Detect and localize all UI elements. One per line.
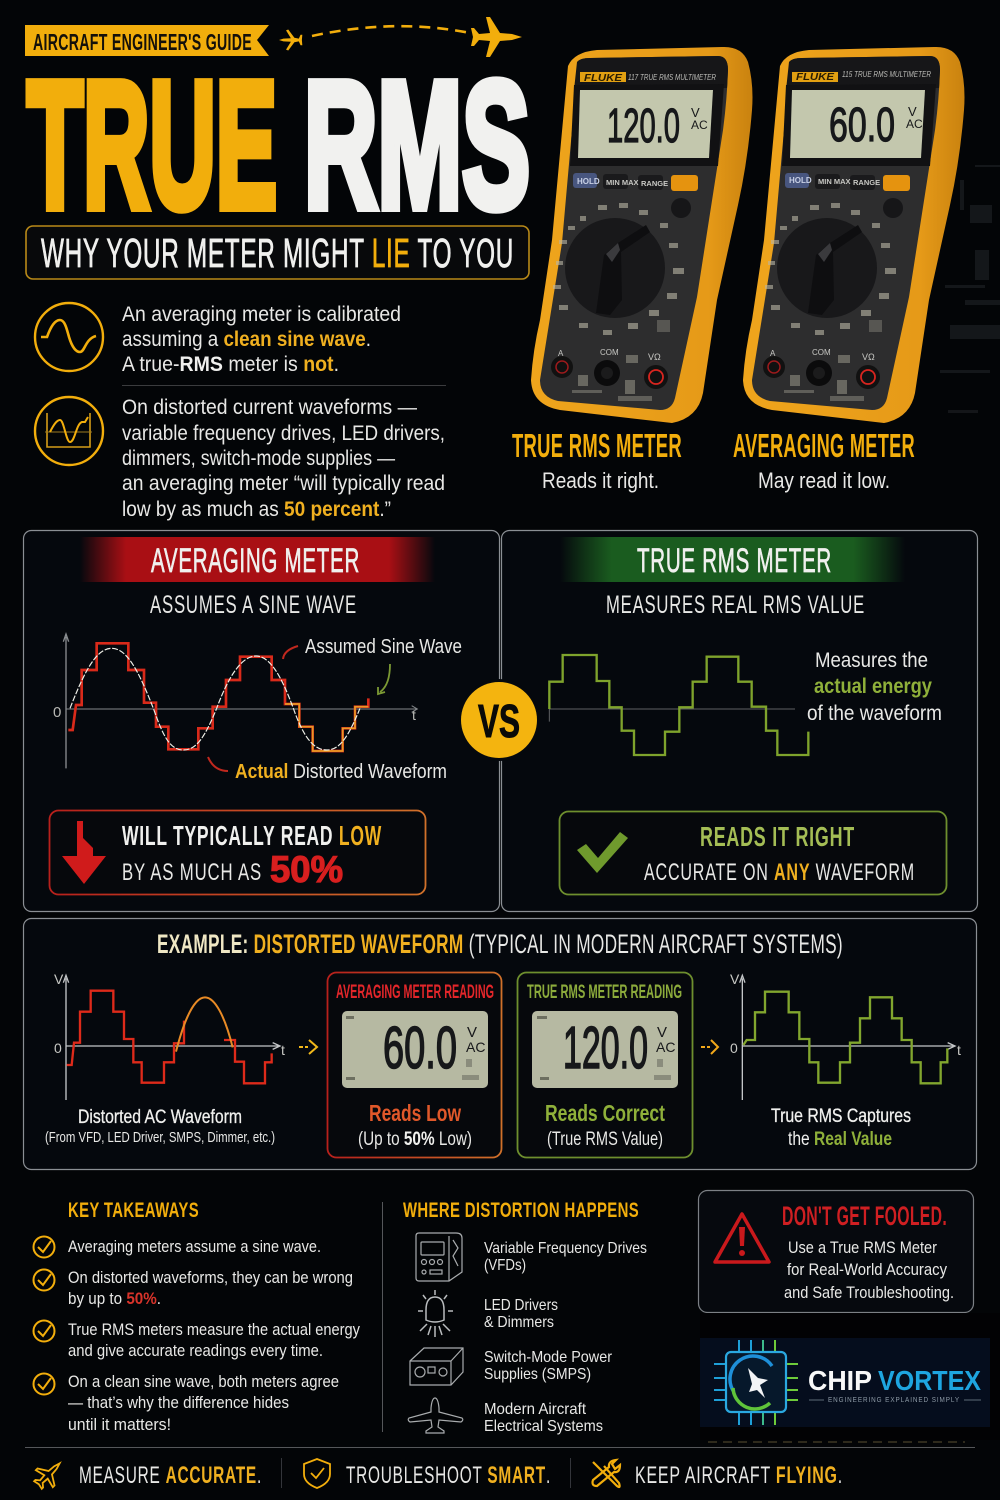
callout text <box>644 821 915 886</box>
heading: KEY TAKEAWAYS <box>68 1199 199 1222</box>
meter caption: averaging: May read it low. <box>758 468 890 493</box>
lcd: 60.0: V <box>467 1024 477 1041</box>
banner: averaging meter: AVERAGING METER <box>151 542 360 580</box>
background: hangar silhouette <box>940 165 1000 413</box>
icon: distorted wave circle <box>35 397 103 465</box>
meter: true rms fluke 117: HOLD <box>577 177 600 186</box>
meter: true rms fluke 117: MIN MAX <box>606 178 638 187</box>
banner: true rms meter <box>560 537 905 582</box>
meter: averaging fluke 115: 60.0 <box>829 99 895 152</box>
list text: & Dimmers <box>484 1314 554 1331</box>
icon: switch-mode power supply <box>410 1348 463 1385</box>
dashed base strip <box>708 1441 965 1443</box>
list text: True RMS meters measure the actual energy <box>68 1320 360 1339</box>
subheading: measures real rms value: MEASURES REAL RMS VALUE <box>606 591 865 619</box>
meter: true rms fluke 117 <box>531 47 752 423</box>
annotation: assumed sine wave <box>283 636 462 694</box>
meter: averaging fluke 115: VΩ <box>862 352 875 362</box>
heading: WHERE DISTORTION HAPPENS <box>403 1199 639 1222</box>
callout text: WILL TYPICALLY READ LOW <box>122 820 382 851</box>
chart labels: t <box>281 1042 285 1058</box>
callout text: ACCURATE ON ANY WAVEFORM <box>644 859 915 886</box>
icon: green check <box>577 832 628 873</box>
meter: true rms fluke 117: 117 TRUE RMS MULTIMETER <box>628 72 716 82</box>
chart labels: t <box>957 1042 961 1058</box>
meter: true rms fluke 117: V <box>691 105 700 120</box>
banner: averaging meter <box>80 537 435 582</box>
list text: Modern Aircraft <box>484 1401 587 1418</box>
footer: measure accurate <box>29 1455 262 1494</box>
list text: Averaging meters assume a sine wave. <box>68 1237 321 1256</box>
lcd: 60.0: AC <box>466 1039 485 1055</box>
meter caption: true rms: TRUE RMS METER <box>512 427 682 464</box>
list text <box>484 1240 647 1435</box>
text: measures the actual energy <box>807 649 942 725</box>
card: true rms meter reading: (True RMS Value) <box>547 1129 663 1150</box>
meter caption: true rms: Reads it right. <box>542 468 659 493</box>
section: key takeaways <box>34 1199 360 1434</box>
icon: flight path with planes <box>279 17 522 57</box>
subtitle box: WHY YOUR METER MIGHT LIE TO YOU <box>41 230 514 276</box>
text block: intro one: A true-RMS meter is not. <box>122 353 339 376</box>
footer: troubleshoot smart: TROUBLESHOOT SMART. <box>346 1462 551 1489</box>
list text: Variable Frequency Drives <box>484 1240 647 1257</box>
list text: (VFDs) <box>484 1257 526 1274</box>
chart labels: V <box>730 971 740 987</box>
card: true rms meter reading <box>518 972 692 1158</box>
meter caption: averaging <box>733 427 915 493</box>
callout text: BY AS MUCH AS <box>122 859 262 886</box>
callout text: 50% <box>270 849 343 890</box>
callout text: Use a True RMS Meter <box>788 1238 937 1257</box>
list text: until it matters! <box>68 1415 171 1434</box>
card: averaging meter reading <box>328 972 502 1158</box>
text block: intro two <box>122 396 445 521</box>
chart: distorted ac waveform <box>63 975 280 1100</box>
list text: On distorted waveforms, they can be wrong <box>68 1268 353 1287</box>
footer: keep aircraft flying: KEEP AIRCRAFT FLYING. <box>635 1462 843 1489</box>
axis labels: 0 <box>53 704 61 721</box>
caption: distorted ac waveform: (From VFD, LED Driver, SMPS, Dimmer, etc.) <box>45 1129 275 1146</box>
meter: averaging fluke 115: A <box>770 349 776 358</box>
list text: LED Drivers <box>484 1297 558 1314</box>
meter: averaging fluke 115: FLUKE <box>796 72 834 83</box>
chart labels: 0 <box>54 1040 62 1056</box>
list text: Supplies (SMPS) <box>484 1366 591 1383</box>
meter: true rms fluke 117: FLUKE <box>584 73 622 84</box>
icon: led bulb <box>418 1290 453 1337</box>
chart labels <box>730 971 961 1058</box>
text block: intro one: assuming a clean sine wave. <box>122 328 371 351</box>
meter: averaging fluke 115: COM <box>812 348 831 357</box>
banner: true rms meter: TRUE RMS METER <box>637 542 832 580</box>
meter: averaging fluke 115: 115 TRUE RMS MULTIMETER <box>842 69 931 79</box>
text block: intro two: an averaging meter “will typically read <box>122 472 445 495</box>
list text: Switch-Mode Power <box>484 1349 613 1366</box>
lcd: 60.0: 60.0 <box>383 1015 457 1081</box>
card: true rms meter reading: TRUE RMS METER READING <box>527 982 682 1003</box>
chart: true rms waveform <box>740 975 955 1100</box>
icon: aircraft <box>408 1398 463 1433</box>
lcd: 120.0: AC <box>656 1039 675 1055</box>
callout text <box>782 1201 954 1302</box>
title: true rms: RMS <box>304 45 530 246</box>
icon: red down arrow <box>62 821 106 884</box>
card: averaging meter reading: (Up to 50% Low) <box>358 1129 472 1150</box>
header tag: aircraft engineer's guide <box>25 25 269 56</box>
panel: averaging meter <box>24 530 500 912</box>
text block: intro two: On distorted current waveforms — <box>122 396 417 419</box>
meter caption: true rms <box>512 427 682 493</box>
callout: reads right <box>560 812 946 894</box>
footer: keep aircraft flying <box>570 1458 843 1489</box>
subheading: assumes a sine wave: ASSUMES A SINE WAVE <box>150 591 357 619</box>
chart labels: 0 <box>730 1040 738 1056</box>
meter: true rms fluke 117: RANGE <box>641 179 668 188</box>
arrow <box>299 1040 317 1054</box>
annotation: assumed sine wave: Assumed Sine Wave <box>305 636 462 658</box>
chip icon <box>714 1340 798 1425</box>
footer: measure accurate: MEASURE ACCURATE. <box>79 1462 262 1489</box>
caption: distorted ac waveform: Distorted AC Waveform <box>78 1107 242 1128</box>
caption: true rms captures: the Real Value <box>788 1129 892 1150</box>
icon: variable frequency drive <box>416 1233 462 1281</box>
section: where distortion happens <box>403 1199 647 1435</box>
icon: sine wave circle <box>35 303 103 371</box>
text block: intro two: dimmers, switch-mode supplies — <box>122 447 395 470</box>
meter: true rms fluke 117: AC <box>691 118 708 132</box>
meter: true rms fluke 117: VΩ <box>648 352 661 362</box>
text block: intro one: An averaging meter is calibrated <box>122 303 401 326</box>
chart: distorted waveform vs assumed sine <box>63 634 417 768</box>
footer: troubleshoot smart <box>281 1458 551 1489</box>
list text: — that’s why the difference hides <box>68 1393 289 1412</box>
meter: true rms fluke 117: A <box>558 349 564 358</box>
axis labels <box>53 704 416 723</box>
text: measures the actual energy: of the waveform <box>807 702 942 725</box>
card: true rms meter reading: Reads Correct <box>545 1100 665 1126</box>
list text: Electrical Systems <box>484 1418 603 1435</box>
list text <box>68 1237 360 1434</box>
meter: averaging fluke 115: MIN MAX <box>818 177 850 186</box>
wordmark: CHIP <box>808 1365 872 1396</box>
lcd: 120.0 <box>532 1011 678 1088</box>
text block: intro one <box>122 303 401 376</box>
arrow <box>701 1040 718 1054</box>
icons: check marks <box>34 1236 54 1394</box>
text: measures the actual energy: Measures the <box>815 649 928 672</box>
header tag: aircraft engineer's guide: AIRCRAFT ENGINEER'S GUIDE <box>33 29 252 55</box>
callout text: and Safe Troubleshooting. <box>784 1283 954 1302</box>
lcd: 120.0: 120.0 <box>563 1015 648 1081</box>
callout text: for Real-World Accuracy <box>787 1260 947 1279</box>
caption: true rms captures: True RMS Captures <box>771 1106 911 1127</box>
meter: averaging fluke 115: HOLD <box>789 176 812 185</box>
callout text: READS IT RIGHT <box>700 821 855 852</box>
meter: averaging fluke 115: AC <box>906 117 923 131</box>
callout: reads low <box>50 810 426 894</box>
lcd: 120.0: V <box>657 1024 667 1041</box>
wordmark <box>808 1365 981 1404</box>
caption: distorted ac waveform <box>45 1107 275 1146</box>
chart: measured waveform <box>549 655 808 755</box>
callout text <box>122 820 382 890</box>
meter: averaging fluke 115: V <box>908 104 917 119</box>
panel: true rms meter <box>502 530 978 912</box>
vs badge: VS <box>478 695 520 747</box>
title: true rms: TRUE <box>27 45 277 246</box>
meter: averaging fluke 115: RANGE <box>853 178 880 187</box>
panel: example distorted waveform <box>24 918 976 1170</box>
lcd: 60.0 <box>342 1011 488 1088</box>
list text: by up to 50%. <box>68 1289 161 1308</box>
text block: intro two: low by as much as 50 percent.” <box>122 498 391 521</box>
card: averaging meter reading: AVERAGING METER READING <box>336 982 494 1003</box>
logo: chip vortex <box>700 1313 1000 1442</box>
chart labels: V <box>54 971 64 987</box>
annotation: actual distorted waveform <box>208 757 447 783</box>
card: averaging meter reading: Reads Low <box>369 1100 461 1126</box>
caption: true rms captures <box>771 1106 911 1150</box>
meter: true rms fluke 117: COM <box>600 348 619 357</box>
meter: averaging fluke 115 <box>743 47 964 423</box>
callout: don't get fooled <box>698 1190 974 1312</box>
icon: warning triangle <box>715 1214 769 1262</box>
text: measures the actual energy: actual energy <box>814 675 932 698</box>
list text: On a clean sine wave, both meters agree <box>68 1372 339 1391</box>
annotation: actual distorted waveform: Actual Distorted Waveform <box>235 761 447 783</box>
wordmark: VORTEX <box>878 1365 981 1396</box>
list text: and give accurate readings every time. <box>68 1341 323 1360</box>
text block: intro two: variable frequency drives, LED drivers, <box>122 422 445 445</box>
meter: true rms fluke 117: 120.0 <box>607 100 680 153</box>
axis labels: t <box>412 707 416 723</box>
chart labels <box>54 971 285 1058</box>
vs badge <box>458 679 540 761</box>
wordmark: ENGINEERING EXPLAINED SIMPLY <box>828 1397 960 1404</box>
